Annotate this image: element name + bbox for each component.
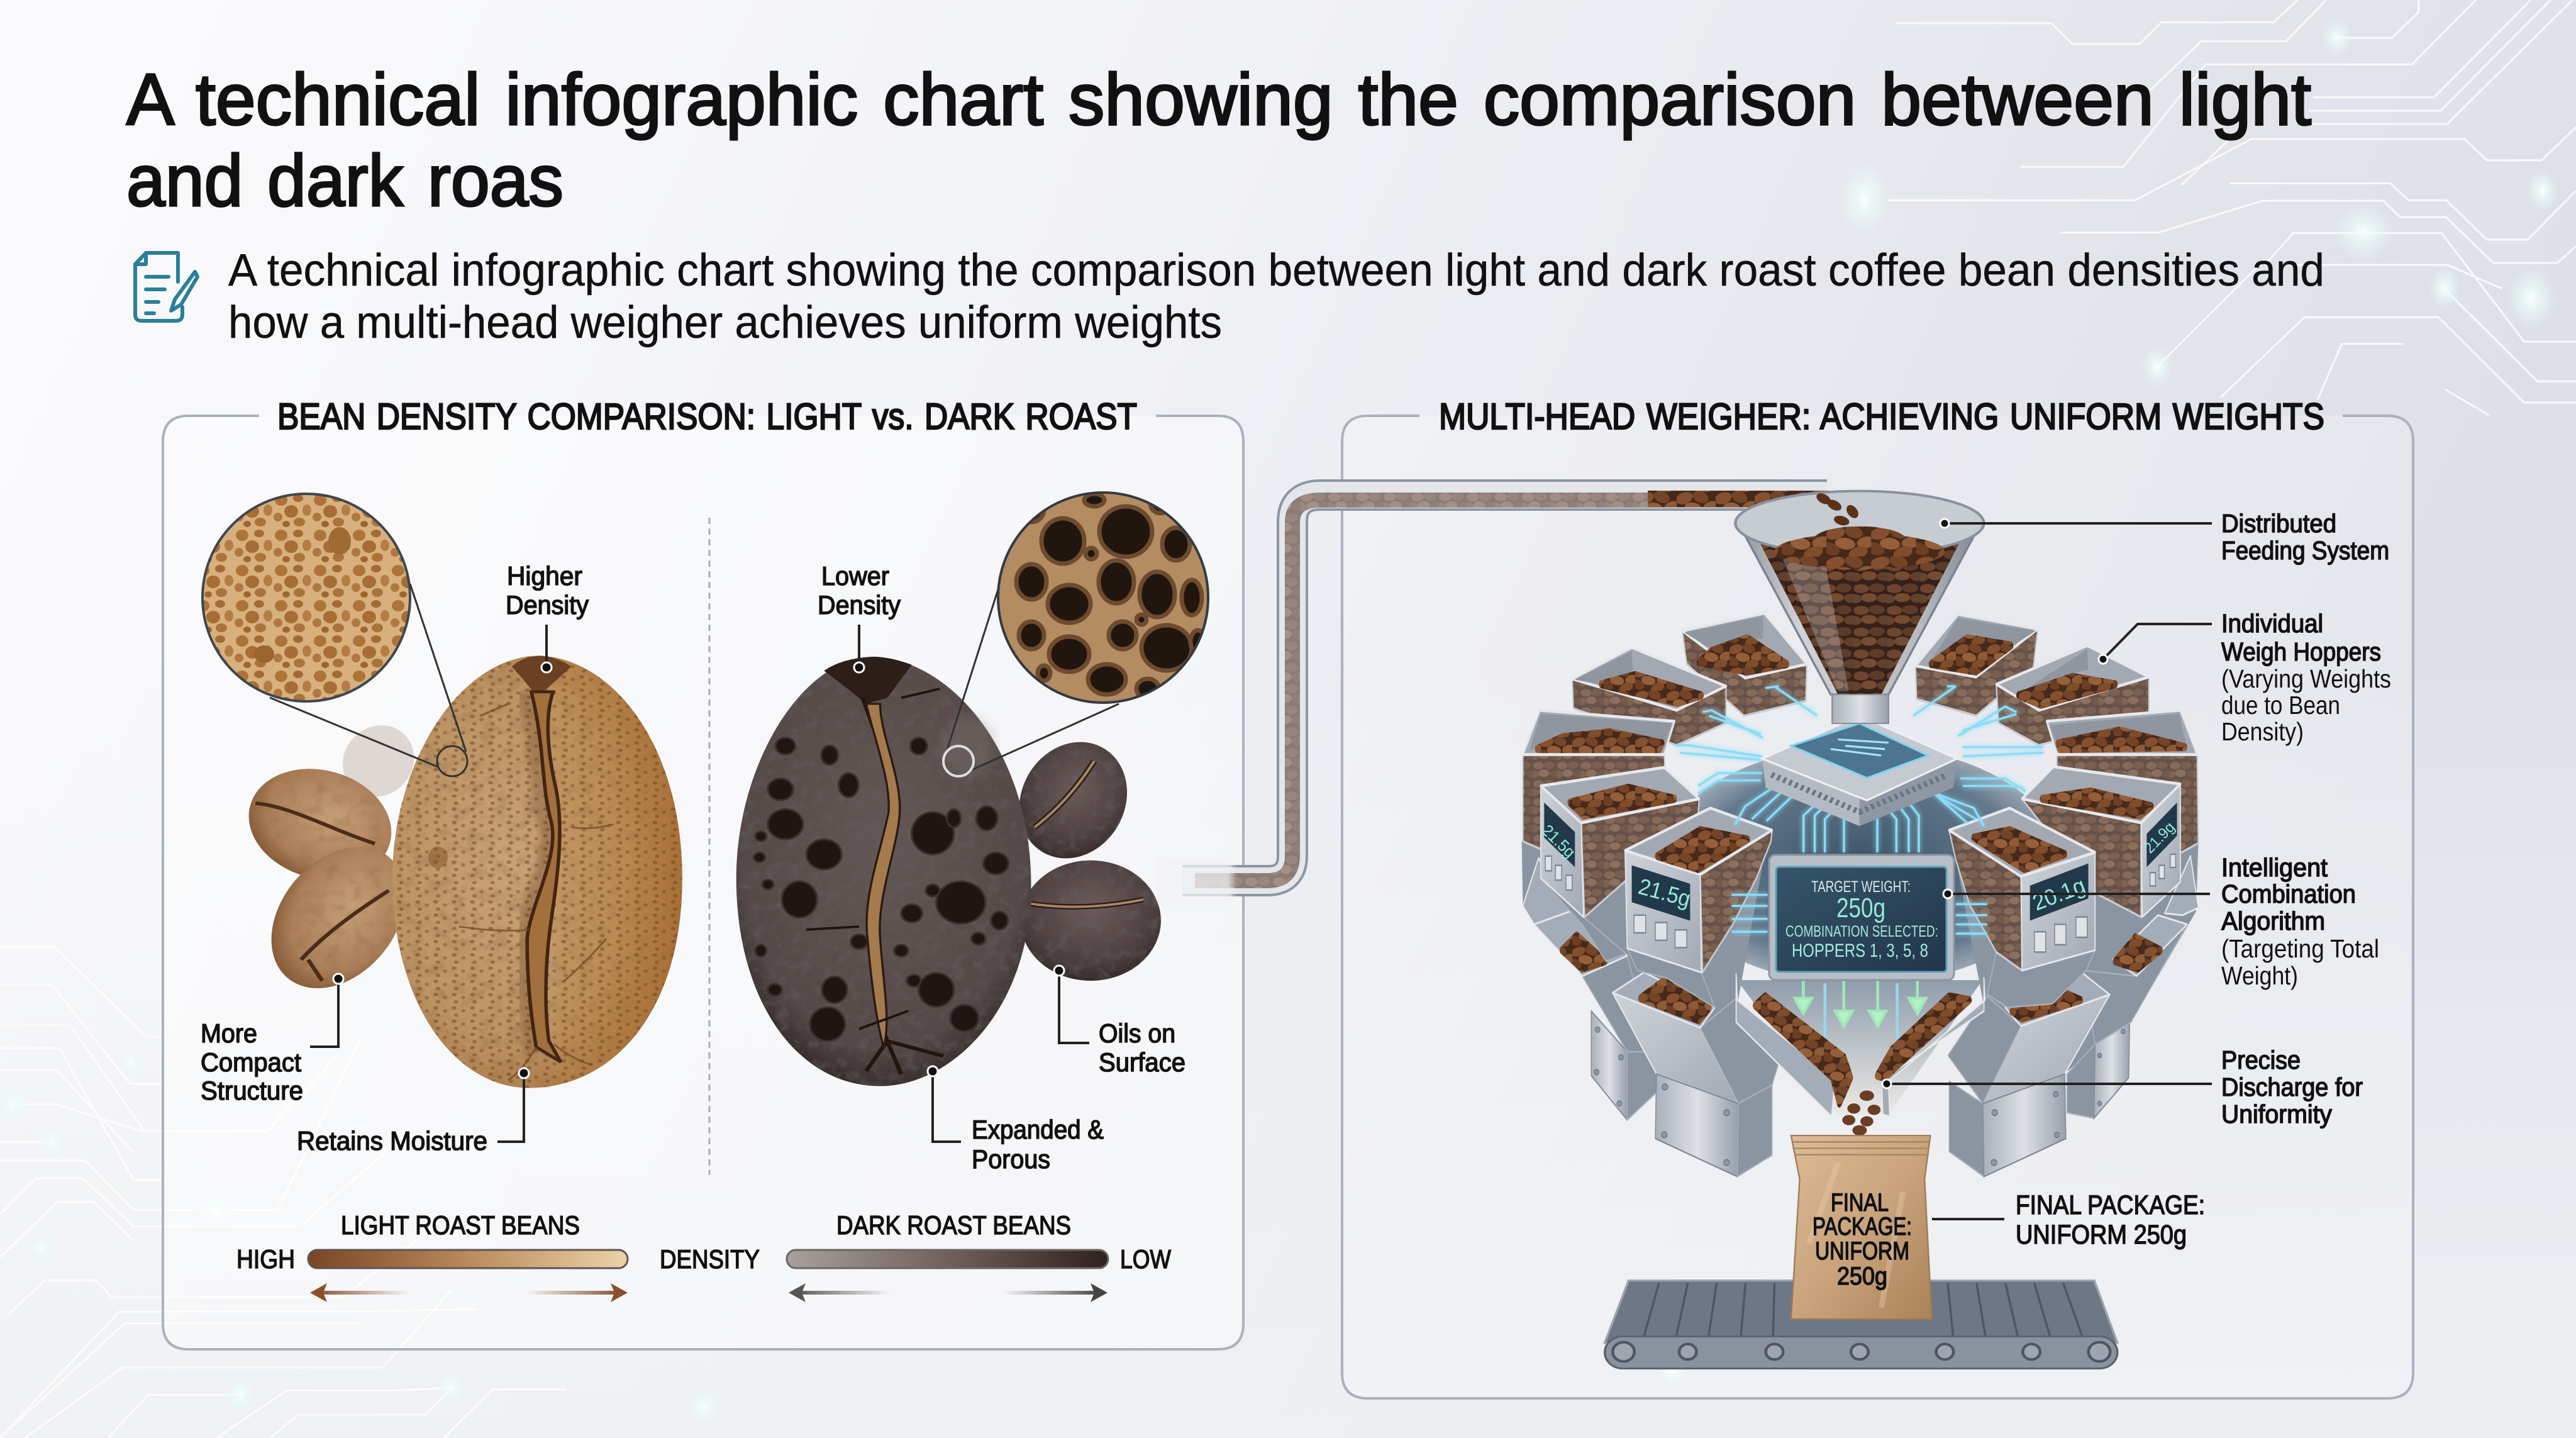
title: A technical infographic chart showing the comparison between light — [126, 59, 2311, 140]
control screen: COMBINATION SELECTED: — [1785, 923, 1938, 940]
hoppers left — [1523, 613, 1807, 1008]
label: precise discharge: Discharge for — [2221, 1073, 2363, 1101]
zoom callout lines — [270, 584, 467, 776]
panel frame — [1342, 416, 2413, 1398]
label: oils on surface — [1054, 966, 1185, 1077]
control screen: TARGET WEIGHT: — [1811, 878, 1911, 896]
label: intelligent combination algorithm — [1943, 853, 2379, 990]
label: more compact structure: More — [201, 1018, 257, 1048]
label: precise discharge — [1882, 1045, 2363, 1129]
label: lower density — [818, 561, 901, 672]
label: individual weigh hoppers: Individual — [2221, 609, 2323, 638]
label: oils on surface: Oils on — [1099, 1018, 1175, 1048]
pipe conveyor — [1157, 495, 1833, 903]
label: expanded and porous: Porous — [972, 1144, 1050, 1174]
subtitle: how a multi-head weigher achieves uniform weights — [228, 298, 1222, 348]
package label: UNIFORM — [1815, 1237, 1909, 1265]
magnified dark structure — [943, 493, 1208, 776]
package label — [1813, 1189, 1912, 1290]
label: precise discharge: Precise — [2221, 1045, 2301, 1074]
hopper weight readouts: 21.5g — [1538, 821, 1579, 861]
discharge gap with arrows — [1737, 980, 1982, 1115]
label: expanded and porous: Expanded & — [972, 1115, 1104, 1144]
input funnel — [1735, 491, 1984, 723]
label: oils on surface: Surface — [1099, 1047, 1185, 1077]
right body filler — [1951, 819, 2199, 1074]
label: expanded and porous — [928, 1066, 1104, 1174]
central discharge chute — [1736, 974, 1985, 1135]
right discharge arm — [1877, 978, 1985, 1117]
package label: 250g — [1837, 1262, 1887, 1290]
panel: multi-head weigher — [1157, 396, 2413, 1398]
density scale: HIGH — [236, 1244, 295, 1274]
heading: multi-head weigher: MULTI-HEAD WEIGHER: ACHIEVING UNIFORM WEIGHTS — [1439, 396, 2324, 437]
hopper weight readouts — [1538, 819, 2179, 915]
package label: PACKAGE: — [1813, 1213, 1912, 1240]
label: final package uniform: UNIFORM 250g — [2016, 1220, 2187, 1250]
dark density bar — [787, 1250, 1108, 1268]
large light bean — [392, 655, 682, 1088]
density scale: DENSITY — [660, 1244, 760, 1274]
label: intelligent combination algorithm: (Targeting Total — [2221, 934, 2379, 963]
label: individual weigh hoppers: Weigh Hoppers — [2221, 637, 2381, 666]
control screen: 250g — [1836, 893, 1885, 923]
light density bar — [308, 1250, 628, 1268]
label: intelligent combination algorithm: Combination — [2221, 879, 2356, 908]
control screen — [1769, 855, 1954, 980]
density arrows — [310, 1283, 1108, 1302]
panel: bean density comparison — [163, 396, 2413, 1398]
falling beans — [1842, 1091, 1880, 1135]
label: higher density: Higher — [507, 561, 582, 591]
label: more compact structure: Structure — [201, 1076, 303, 1105]
control screen: HOPPERS 1, 3, 5, 8 — [1792, 940, 1928, 961]
density scale: LOW — [1120, 1244, 1171, 1274]
dark roast beans illustration — [736, 657, 1161, 1086]
label: more compact structure: Compact — [201, 1047, 301, 1077]
left discharge arm — [1736, 974, 1851, 1117]
label: lower density: Lower — [821, 561, 889, 591]
package label: FINAL — [1831, 1189, 1889, 1217]
weigher right side — [1916, 614, 2199, 1176]
weigher left side — [1522, 613, 1807, 1176]
hoppers right — [1916, 614, 2199, 1008]
label: intelligent combination algorithm: Intelligent — [2221, 853, 2328, 882]
divider — [708, 518, 711, 1175]
icon: document with pencil — [135, 253, 197, 321]
label: distributed feeding system: Feeding System — [2221, 536, 2389, 565]
subtitle — [228, 245, 2324, 348]
circuit wires — [1675, 686, 2043, 934]
label: retains moisture — [297, 1068, 529, 1156]
label: individual weigh hoppers — [2099, 609, 2391, 746]
hopper weight readouts: 21.5g — [1636, 873, 1694, 911]
left lower chutes — [1523, 858, 1779, 1176]
label: final package uniform: FINAL PACKAGE: — [2016, 1190, 2205, 1220]
label: distributed feeding system — [1940, 509, 2389, 565]
left body filler — [1522, 805, 1779, 1085]
machine hub backdrop — [1660, 745, 2063, 984]
label: higher density: Density — [506, 590, 589, 620]
label: distributed feeding system: Distributed — [2221, 509, 2336, 538]
label: individual weigh hoppers: (Varying Weights — [2221, 664, 2391, 693]
label: retains moisture: Retains Moisture — [297, 1126, 487, 1156]
light roast beans illustration — [226, 655, 682, 1088]
hopper weight readouts: 20.1g — [2029, 872, 2089, 915]
label: lower density: Density — [818, 590, 901, 620]
density scale — [236, 1210, 1171, 1302]
zoom callout lines — [943, 589, 1119, 776]
density scale: DARK ROAST BEANS — [836, 1210, 1071, 1240]
final package bag — [1791, 1135, 1932, 1319]
label: higher density — [506, 561, 589, 672]
label: intelligent combination algorithm: Algorithm — [2221, 906, 2325, 935]
label: individual weigh hoppers: due to Bean — [2221, 691, 2340, 720]
heading: bean density comparison: BEAN DENSITY COMPARISON: LIGHT vs. DARK ROAST — [277, 396, 1137, 437]
label: final package uniform — [1932, 1190, 2205, 1250]
large dark bean — [736, 657, 1031, 1086]
title — [126, 59, 2311, 221]
conveyor belt — [1605, 1281, 2118, 1368]
label: intelligent combination algorithm: Weight) — [2221, 961, 2298, 990]
label: precise discharge: Uniformity — [2221, 1100, 2332, 1129]
magnified light structure — [203, 494, 467, 776]
subtitle: A technical infographic chart showing the comparison between light and dark roast coffee bean densities and — [228, 245, 2324, 296]
density scale: LIGHT ROAST BEANS — [341, 1210, 580, 1240]
right lower chutes — [1948, 856, 2199, 1176]
hopper weight readouts: 21.9g — [2141, 819, 2179, 857]
panel frame — [163, 416, 1243, 1349]
control chip — [1762, 716, 1957, 826]
title: and dark roas — [126, 140, 564, 221]
label: more compact structure — [201, 974, 343, 1105]
label: individual weigh hoppers: Density) — [2221, 717, 2304, 746]
